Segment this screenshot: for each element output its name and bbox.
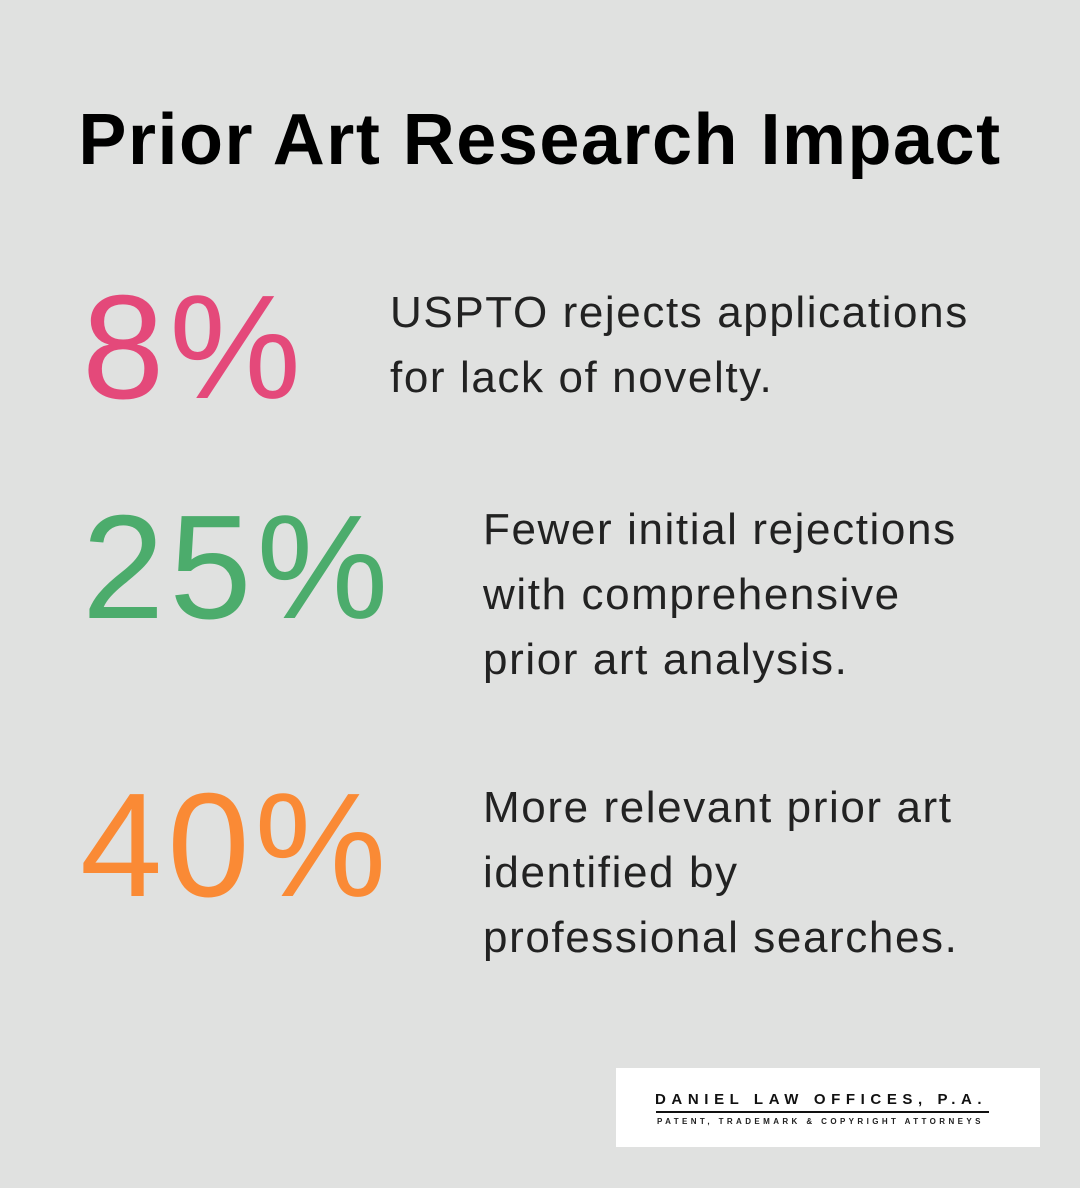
text: 25% description: with comprehensive — [483, 570, 901, 619]
stat: 40%: 40% — [80, 763, 391, 928]
text: 8% description — [390, 288, 969, 402]
logo tagline: PATENT, TRADEMARK & COPYRIGHT ATTORNEYS — [657, 1117, 984, 1126]
stat: 8%: 8% — [82, 265, 306, 430]
text: 40% description: identified by — [483, 848, 739, 897]
text: 8% description: for lack of novelty. — [390, 353, 773, 402]
text: 8% description: USPTO rejects applications — [390, 288, 969, 337]
logo name: DANIEL LAW OFFICES, P.A. — [655, 1091, 987, 1108]
text: 25% description — [483, 505, 957, 684]
text: 25% description: Fewer initial rejections — [483, 505, 957, 554]
logo — [616, 1068, 1040, 1147]
title: Prior Art Research Impact — [78, 100, 1002, 180]
text: 40% description: More relevant prior art — [483, 783, 953, 832]
text: 40% description: professional searches. — [483, 913, 958, 962]
text: 25% description: prior art analysis. — [483, 635, 848, 684]
text: 40% description — [483, 783, 958, 962]
stat: 25%: 25% — [82, 485, 393, 650]
